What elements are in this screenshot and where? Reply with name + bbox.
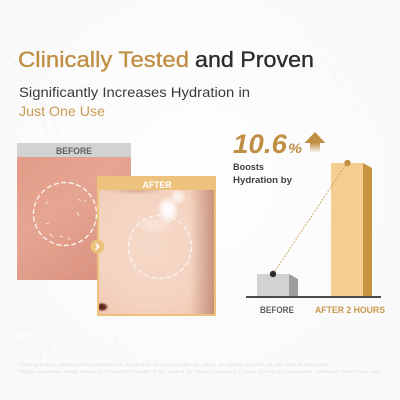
panel: before photo [17,143,131,280]
dot: after [344,160,351,166]
before dashed circle [34,182,96,246]
title: Clinically Tested [18,47,189,72]
footnote: *Digital simulation image based on clinical test results on file. Based on results measured 2 hours after single application. Individual results may vary. [18,369,382,374]
label: after 2 hours: AFTER 2 HOURS [315,305,385,316]
bar: before [257,274,298,296]
trend line [273,163,347,274]
stat label: Hydration by [233,175,293,186]
label: before: BEFORE [260,305,294,316]
bar chart [246,160,385,316]
before header: BEFORE [56,146,92,157]
stat label: Boosts [233,162,264,173]
subtitle: Just One Use [19,103,105,119]
panel: after photo [95,176,216,316]
subtitle [19,84,250,119]
icon: arrow badge [90,240,104,254]
icon: up arrow [304,132,326,152]
stat label [233,162,293,186]
footnote: *Clinical testing conducted by Luamed from November 22 to December 20, 2024, on women aged 25-45 with normal skin types. [18,362,330,367]
bar: after 2 hours [331,163,372,296]
after dashed circle [128,216,192,278]
title: and Proven [195,47,314,72]
stat: 10.6%: 10.6 [233,129,288,159]
axis [246,296,381,298]
stat: 10.6%: % [288,140,303,156]
subtitle: Significantly Increases Hydration in [19,84,250,100]
title [18,47,314,72]
footnote [18,362,382,374]
dot: before [270,271,276,277]
dry flakes [46,199,86,240]
after header: AFTER [142,180,172,191]
